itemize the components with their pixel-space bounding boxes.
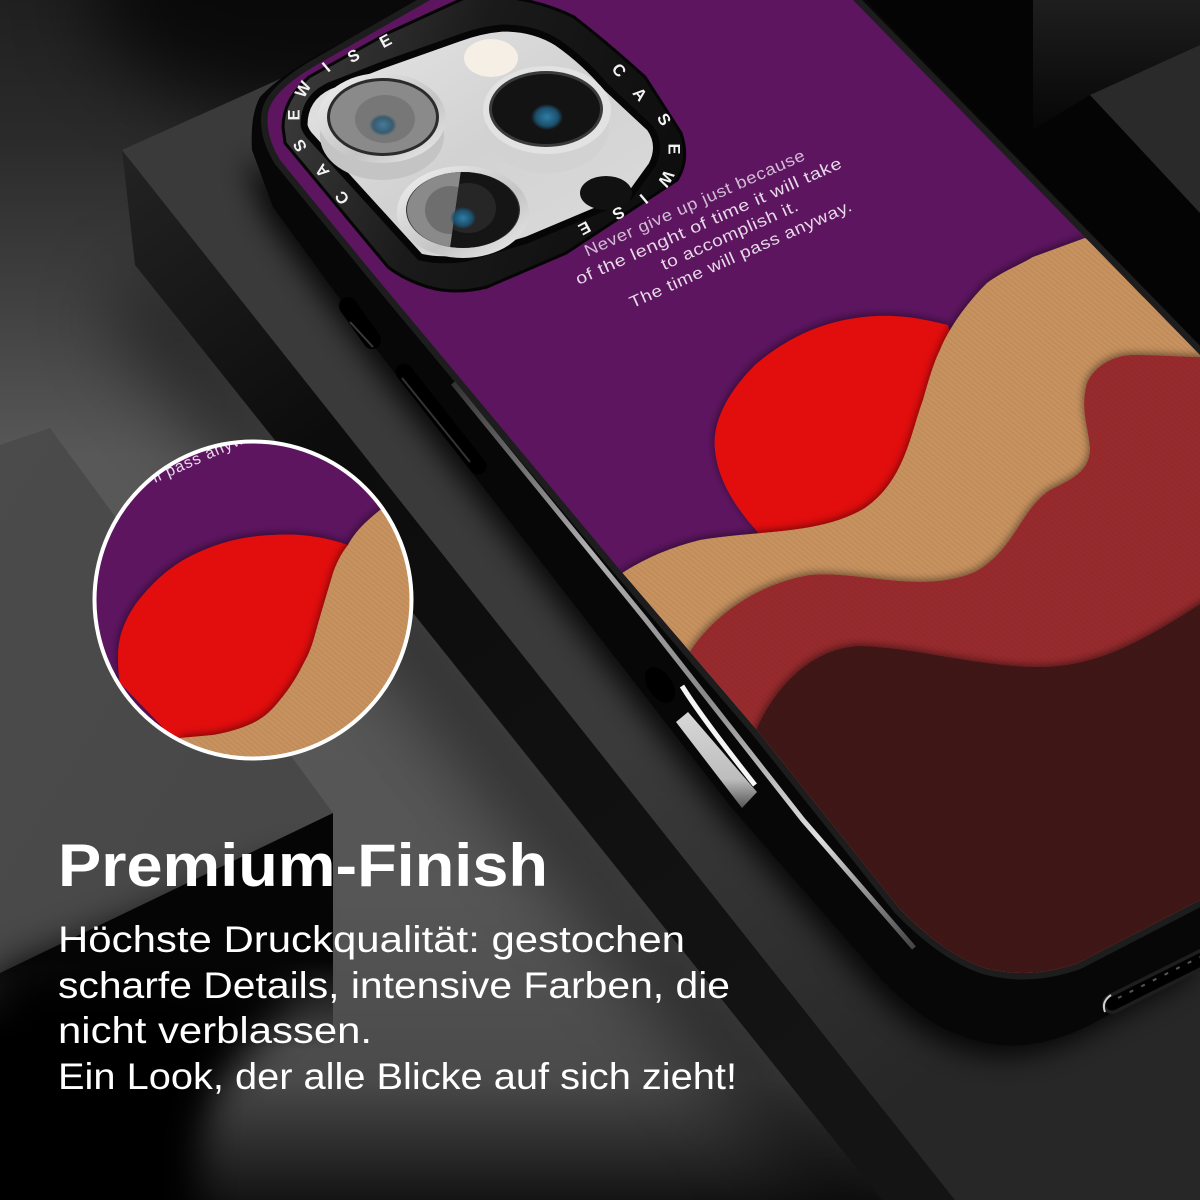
brand ring: left CASEWISE: S: [290, 136, 311, 155]
red sun: [715, 316, 965, 545]
magnifier red shape: [118, 534, 348, 745]
brand ring: right CASEWISE: E: [665, 143, 683, 155]
brand ring: right CASEWISE: C: [608, 60, 629, 81]
lens three: [397, 166, 527, 258]
charging port: [1104, 955, 1200, 1012]
body copy: nicht verblassen.: [58, 1010, 372, 1051]
large block side face: [122, 150, 955, 1200]
rear black void and blocks: [853, 0, 1200, 400]
brand ring: right CASEWISE: S: [609, 202, 627, 223]
camera island: [283, 0, 685, 291]
small block front face: [0, 813, 333, 1200]
quote text: [573, 146, 855, 312]
brand ring: left CASEWISE: E: [377, 31, 395, 52]
brand ring: right CASEWISE: S: [653, 110, 674, 129]
lens one: [318, 73, 446, 180]
body copy: Höchste Druckqualität: gestochen: [58, 919, 685, 960]
brand ring: left CASEWISE: W: [292, 78, 315, 101]
bezel: [268, 0, 1200, 973]
magnifier quote fragment: ll pass anyway.: [150, 421, 268, 487]
brand ring: right CASEWISE: I: [636, 190, 651, 207]
flash: [464, 39, 518, 77]
body copy: [58, 919, 737, 1097]
action button: [348, 306, 373, 347]
dark maroon wave: [752, 596, 1200, 973]
brand ring: right CASEWISE: A: [629, 84, 650, 105]
body copy: scharfe Details, intensive Farben, die: [58, 965, 730, 1006]
volume button: [402, 372, 478, 466]
magnifier callout: [92, 440, 414, 760]
brand ring: left CASEWISE: I: [319, 59, 334, 76]
magnifier purple: [96, 444, 381, 729]
brick red wave: [680, 355, 1200, 1000]
lens two: [483, 66, 611, 173]
brand ring: right CASEWISE: W: [654, 167, 677, 190]
quote text: to accomplish it.: [658, 197, 802, 274]
phone case body: [244, 0, 1200, 1055]
brand ring: right CASEWISE: E: [575, 217, 593, 238]
small block top: [0, 428, 333, 973]
body copy: Ein Look, der alle Blicke auf sich zieht!: [58, 1056, 737, 1097]
brand ring: left CASEWISE: S: [345, 46, 363, 67]
brand ring: left CASEWISE: E: [285, 109, 303, 121]
brand ring: left CASEWISE: [285, 31, 395, 208]
quote text: The time will pass anyway.: [627, 197, 855, 312]
side buttons: [348, 306, 757, 808]
brand ring: right CASEWISE: [575, 60, 683, 238]
power button silver: [639, 662, 757, 808]
tan wave: [600, 238, 1200, 1000]
quote text: of the lenght of time it will take: [573, 154, 845, 289]
magnifier tan shape: [180, 500, 420, 770]
island frame: [283, 0, 685, 291]
purple background: [268, 0, 1200, 730]
lidar: [580, 176, 632, 210]
glossy edge highlight: [453, 383, 914, 948]
phone back print: [268, 0, 1200, 973]
heading: Premium-Finish: [58, 832, 548, 899]
shadow beside large block: [135, 290, 882, 1200]
glass window: [304, 28, 657, 260]
brand ring: left CASEWISE: C: [332, 187, 353, 208]
brand ring: left CASEWISE: A: [312, 160, 333, 181]
quote text: Never give up just because: [582, 146, 808, 260]
